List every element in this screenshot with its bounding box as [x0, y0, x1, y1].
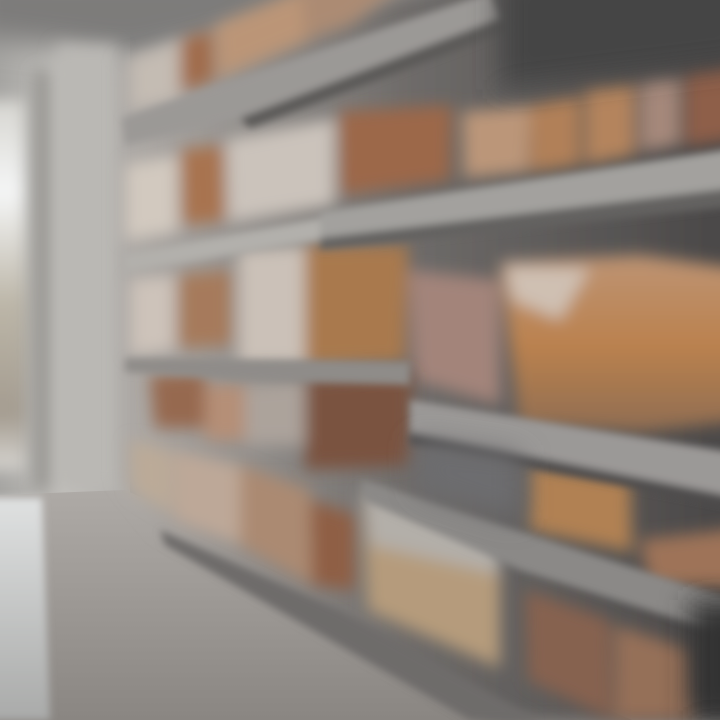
boxes: fourth row	[150, 372, 720, 590]
boxes: second row	[125, 62, 720, 240]
floor	[0, 490, 632, 720]
dark rack corners	[415, 0, 720, 720]
boxes: bottom row	[130, 440, 697, 720]
ceiling shadow	[0, 0, 520, 55]
window	[0, 100, 26, 470]
boxes: top shelf	[130, 0, 410, 110]
floor reflection	[0, 498, 50, 720]
boxes: third row	[130, 245, 720, 432]
column	[36, 45, 118, 490]
